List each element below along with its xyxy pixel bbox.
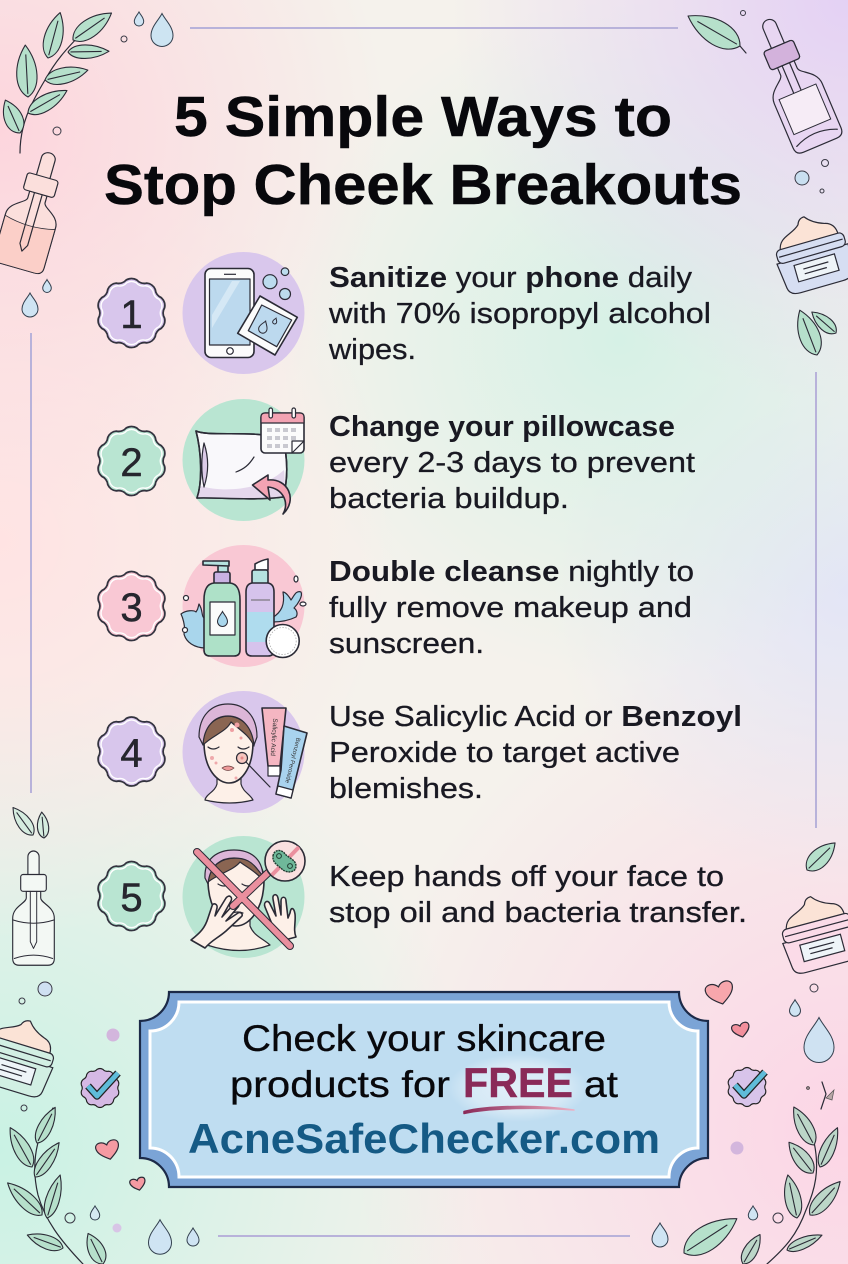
check badge: left — [81, 1069, 119, 1107]
check badge: right — [728, 1068, 766, 1106]
number badge 5: 5 — [120, 876, 143, 920]
icon: hands off face with crossed out bacteria — [182, 836, 305, 958]
dropper bottle: outline left — [13, 851, 54, 965]
step 5 — [98, 836, 747, 958]
step 3 text — [329, 556, 694, 660]
number badge 5 — [98, 861, 165, 931]
decorative line: bottom — [218, 1235, 630, 1237]
step 3 text: Double cleanse nightly to — [329, 556, 694, 588]
leaves: lower left — [8, 804, 50, 839]
step 3 — [98, 545, 694, 667]
hearts: right of banner — [704, 980, 751, 1039]
step 5 text: Keep hands off your face to — [329, 861, 724, 893]
banner line 2: at — [584, 1064, 619, 1105]
step 2 — [98, 399, 695, 521]
step 1 text — [328, 262, 711, 366]
step 1 — [98, 252, 711, 374]
step 1 text: Sanitize your phone daily — [329, 262, 693, 294]
banner inner panel — [150, 1002, 698, 1177]
banner line 2: FREE — [463, 1059, 573, 1106]
number badge 1: 1 — [120, 293, 143, 337]
icon: phone and wipe — [182, 252, 304, 374]
leaf branch: bottom left — [2, 1104, 110, 1264]
title: Stop Cheek Breakouts — [104, 153, 742, 217]
hearts: left of banner — [95, 1139, 147, 1192]
number badge 1 — [98, 278, 165, 348]
dropper bottle: lilac top right — [743, 10, 844, 155]
leaf: bottom — [677, 1208, 744, 1263]
icon: face and acne treatment tubes — [182, 691, 307, 813]
step 4 text: blemishes. — [329, 773, 483, 805]
bubbles: top right — [795, 160, 828, 193]
water drops: left — [22, 280, 51, 317]
water drops: top left — [53, 12, 173, 135]
dot: right — [730, 1142, 744, 1154]
twig: lower right — [807, 1082, 834, 1109]
step 1 text: wipes. — [328, 334, 416, 366]
decorative line: right — [815, 372, 817, 828]
step 1 text: with 70% isopropyl alcohol — [328, 298, 711, 330]
icon: pillow and calendar — [182, 399, 304, 521]
water drops and bubbles: lower right — [652, 984, 834, 1247]
title — [104, 85, 742, 217]
dot: left — [106, 1028, 120, 1042]
step 4 text: Peroxide to target active — [329, 737, 680, 769]
step 2 text — [329, 411, 695, 515]
title: 5 Simple Ways to — [174, 85, 672, 149]
decorative line: left — [30, 333, 32, 793]
banner line 1: Check your skincare — [242, 1018, 606, 1059]
step 4 text — [329, 701, 742, 805]
leaf branch: bottom right — [737, 1103, 846, 1264]
bubbles: lower left — [19, 982, 75, 1223]
step 3 text: sunscreen. — [329, 628, 484, 660]
banner line 2 — [230, 1054, 619, 1122]
icon: face and acne treatment tubes: Benzoyl Peroxide — [283, 737, 301, 784]
number badge 2: 2 — [120, 441, 143, 485]
number badge 2 — [98, 426, 165, 496]
step 2 text: every 2-3 days to prevent — [329, 447, 695, 479]
call to action banner — [140, 992, 708, 1187]
cream jar: blue top right — [767, 207, 848, 297]
step 5 text: stop oil and bacteria transfer. — [329, 897, 747, 929]
leaf branch: top left — [0, 6, 117, 153]
icon: cleansing bottles — [181, 545, 306, 667]
step 3 text: fully remove makeup and — [329, 592, 692, 624]
leaf: top right — [682, 5, 746, 57]
number badge 3 — [98, 571, 165, 641]
banner frame — [140, 992, 708, 1187]
step 4 — [98, 691, 742, 813]
step 2 text: Change your pillowcase — [329, 411, 675, 443]
leaves: right — [790, 307, 840, 359]
cream jar: mint left — [0, 1010, 64, 1100]
banner website: AcneSafeChecker.com — [188, 1115, 660, 1162]
number badge 3: 3 — [120, 586, 143, 630]
step 2 text: bacteria buildup. — [329, 483, 569, 515]
banner line 2: products for — [230, 1064, 450, 1105]
water drops: bottom left — [90, 1206, 199, 1254]
cream jar: pink right — [773, 888, 848, 976]
icon: face and acne treatment tubes: Salicylic Acid — [269, 718, 278, 756]
step 5 text — [329, 861, 747, 929]
dropper bottle: pink left — [0, 146, 75, 275]
leaf: right lower — [801, 836, 841, 876]
decorative line: top — [190, 27, 678, 29]
step 4 text: Use Salicylic Acid or Benzoyl — [329, 701, 742, 733]
number badge 4 — [98, 717, 165, 786]
number badge 4: 4 — [120, 732, 143, 776]
